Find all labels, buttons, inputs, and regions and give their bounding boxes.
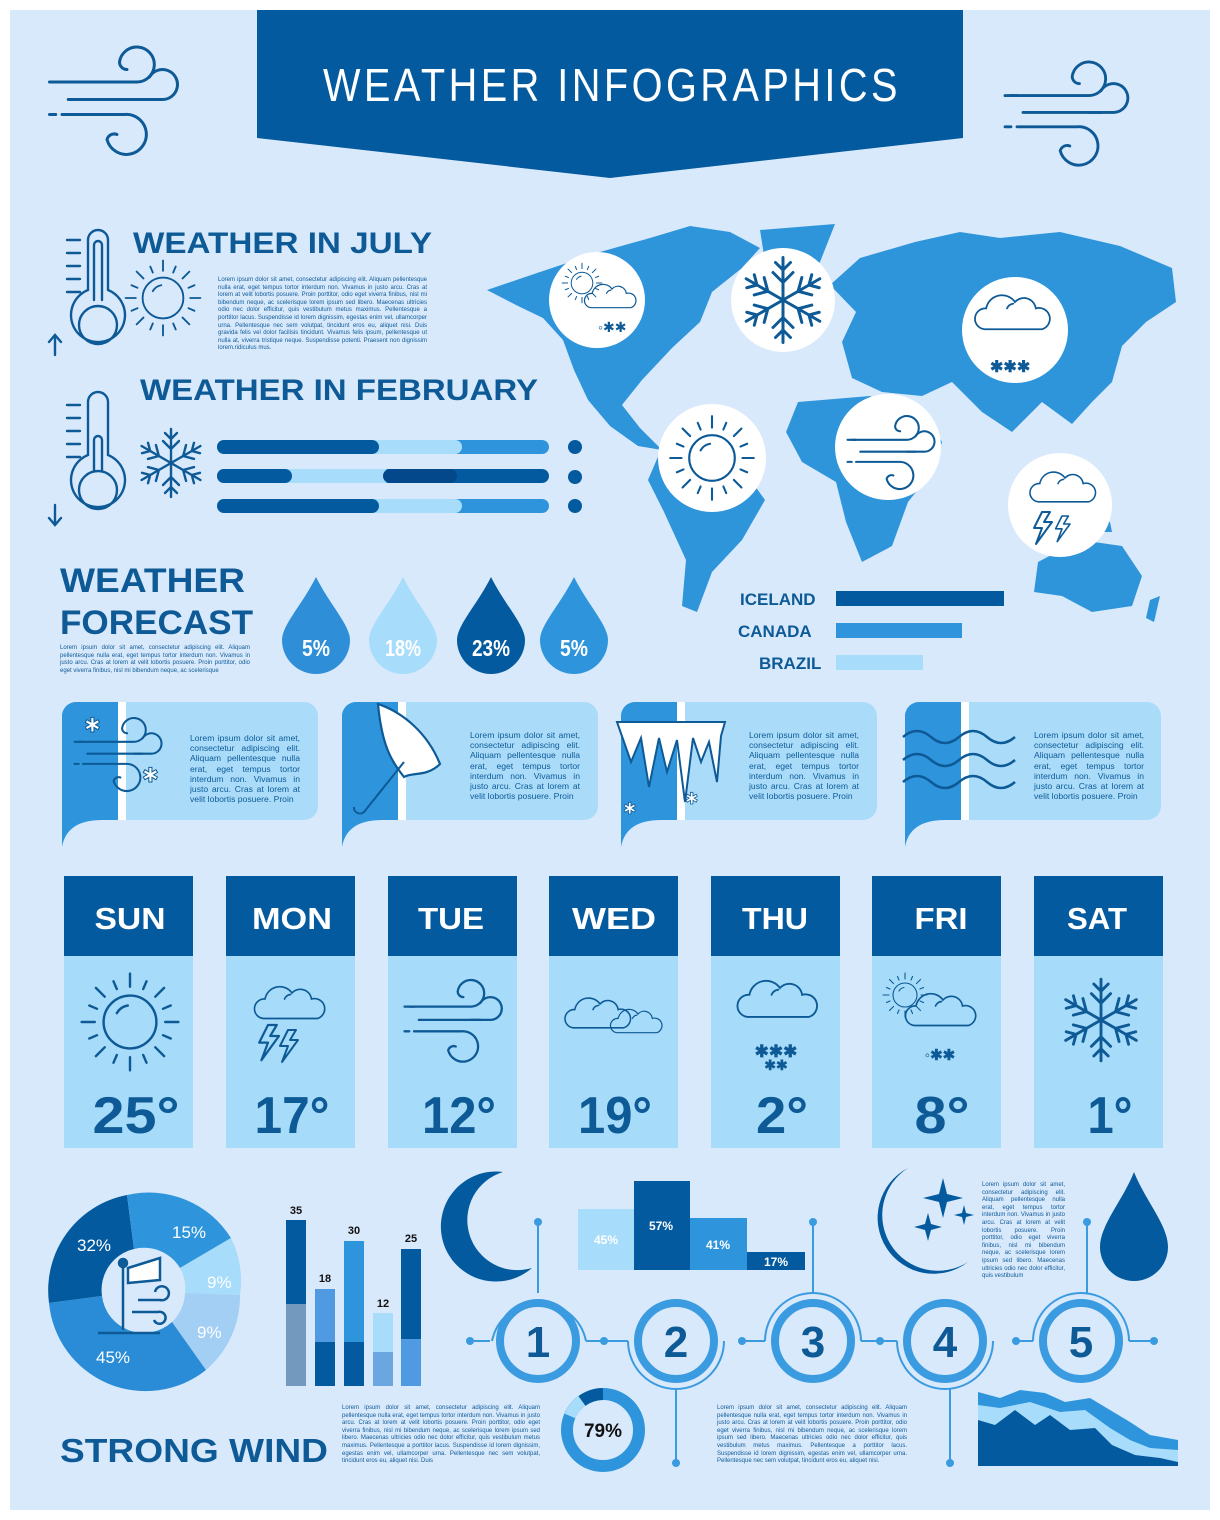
numbered timeline: 4: [933, 1318, 958, 1367]
numbered timeline: [466, 1218, 1158, 1467]
day: sun: [64, 876, 193, 1148]
bar chart: 18: [319, 1273, 331, 1285]
title banner: WEATHER INFOGRAPHICS: [323, 59, 901, 111]
text: moon description: Lorem ipsum dolor sit amet, consectetur adipiscing elit. Aliquam pellentesque nulla erat, eget tempus tortor interdum non. Vivamus in justo arcu. Cras at lorem at velit lobortis posuere. Proin porttitor, odio eget viverra finibus, nisl mi bibendum neque, ac scelerisque lorem ipsum sed libero. Maecenas ultricies odio nec dolor efficitur, quis vestibulum: [982, 1182, 1065, 1279]
day: sun: SUN: [94, 901, 166, 936]
day: tue: TUE: [418, 901, 484, 936]
text: card 1: Lorem ipsum dolor sit amet, consectetur adipiscing elit. Aliquam pellentesque nulla erat, eget tempus tortor interdum non. Vivamus in justo arcu. Cras at lorem at velit lobortis posuere. Proin: [190, 733, 300, 804]
day: sat: [1034, 876, 1163, 1148]
numbered timeline: 5: [1069, 1318, 1093, 1367]
icon: sun july: [126, 261, 200, 335]
day: wed: [549, 876, 678, 1148]
title banner: [257, 10, 963, 178]
day: thu: [711, 876, 840, 1148]
donut chart: wind: 9%: [207, 1273, 232, 1292]
map circles with weather icons: ✱✱✱: [990, 359, 1030, 376]
icon: thermometer up: [49, 230, 125, 355]
text: forecast description: Lorem ipsum dolor sit amet, consectetur adipiscing elit. Aliquam pellentesque nulla erat, eget tempus tortor interdum non. Vivamus in justo arcu. Cras at lorem at velit lobortis posuere. Proin porttitor, odio eget viverra finibus, nisl mi bibendum neque, ac scelerisque: [60, 645, 250, 674]
callout cards: [62, 702, 1161, 847]
map legend: CANADA: [738, 622, 812, 641]
numbered timeline: 3: [801, 1318, 825, 1367]
heading: weather forecast: WEATHER: [60, 562, 245, 600]
bar chart: 30: [348, 1225, 360, 1237]
text: card 2: Lorem ipsum dolor sit amet, consectetur adipiscing elit. Aliquam pellentesque nulla erat, eget tempus tortor interdum non. Vivamus in justo arcu. Cras at lorem at velit lobortis posuere. Proin: [470, 730, 580, 801]
text: july description: Lorem ipsum dolor sit amet, consectetur adipiscing elit. Aliquam pellentesque nulla erat, eget tempus tortor interdum non. Vivamus in justo arcu. Cras at lorem at velit lobortis posuere. Proin porttitor, odio eget viverra finibus, nisl mi bibendum neque, ac scelerisque lorem ipsum sed libero. Maecenas ultricies odio nec dolor efficitur, quis vestibulum metus maximus. Pellentesque a porttitor lacus. Suspendisse id lorem dignissim, egestas enim vel, ullamcorper urna. Pellentesque nec sem volutpat, tincidunt eros eu, aliquet nisi. Duis gravida felis vel dolor facilisis tincidunt. Vivamus felis ipsum, pellentesque ut nulla at, viverra tristique neque. Suspendisse potenti. Praesent non dignissim lorem.ridiculus mus.: [218, 277, 427, 351]
icon: moon: [441, 1172, 532, 1282]
day: sat: SAT: [1067, 901, 1127, 936]
day: thu: ✱✱✱: [755, 1042, 797, 1061]
heading: weather forecast: [60, 562, 253, 642]
day: thu: ✱✱: [764, 1057, 788, 1073]
area chart: [978, 1390, 1178, 1466]
icon: snowflake february: [138, 429, 204, 497]
icon: wind top-left: [50, 47, 177, 154]
map circles with weather icons: [549, 248, 1112, 557]
day: fri: ◦✱✱: [925, 1047, 956, 1064]
bar chart: 25: [405, 1233, 417, 1245]
map legend: ICELAND: [740, 590, 816, 609]
text: timeline description: Lorem ipsum dolor sit amet, consectetur adipiscing elit. Aliquam pellentesque nulla erat, eget tempus tortor interdum non. Vivamus in justo arcu. Cras at lorem at velit lobortis posuere. Proin porttitor, odio eget viverra finibus, nisl mi bibendum neque, ac scelerisque lorem ipsum sed libero. Maecenas ultricies odio nec dolor efficitur, quis vestibulum metus maximus. Pellentesque a porttitor lacus. Suspendisse id lorem dignissim, egestas enim vel, ullamcorper urna. Pellentesque nec sem volutpat, tincidunt eros eu, aliquet nisi.: [717, 1405, 907, 1464]
numbered timeline: 1: [526, 1318, 550, 1367]
callout: snowy wind: ✱: [84, 715, 101, 737]
day: wed: 19°: [578, 1087, 652, 1145]
day: wed: WED: [572, 901, 656, 936]
callout: umbrella: [342, 702, 598, 847]
heading: weather in february: WEATHER IN FEBRUARY: [140, 374, 538, 407]
day: sun: 25°: [92, 1087, 180, 1145]
icon: thermometer down: [49, 392, 125, 525]
donut: 79%: 79%: [584, 1421, 622, 1442]
map legend: BRAZIL: [759, 654, 821, 673]
bar chart: 12: [377, 1298, 389, 1310]
callout: icicles: [617, 702, 877, 847]
donut chart: wind: 9%: [197, 1323, 222, 1342]
drops: forecast percentages: 5%: [302, 635, 330, 661]
donut: 79%: [567, 1394, 639, 1466]
callout: icicles: ✱: [623, 801, 636, 818]
heading: weather forecast: FORECAST: [60, 604, 253, 642]
bar chart: [286, 1205, 421, 1386]
drops: forecast percentages: [282, 577, 608, 674]
step bar chart: 41%: [706, 1238, 730, 1252]
heading: weather in july: WEATHER IN JULY: [133, 227, 432, 260]
day: tue: [388, 876, 517, 1148]
day: fri: FRI: [914, 901, 968, 936]
donut chart: wind: 15%: [172, 1223, 206, 1242]
heading: strong wind: STRONG WIND: [60, 1432, 328, 1469]
icon: moon and stars: [878, 1168, 974, 1274]
day forecast cards: [64, 876, 1163, 1148]
day: mon: MON: [252, 901, 332, 936]
step bar chart: 17%: [764, 1255, 788, 1269]
callout: snowy wind: ✱: [142, 765, 159, 787]
day: mon: 17°: [254, 1087, 330, 1145]
day: mon: [226, 876, 355, 1148]
map circles with weather icons: ◦✱✱: [598, 319, 626, 335]
day: sat: 1°: [1088, 1087, 1132, 1145]
icon: drop: [1100, 1172, 1168, 1281]
day: fri: [872, 876, 1001, 1148]
callout: snowy wind: [62, 702, 318, 847]
drops: forecast percentages: 23%: [472, 635, 510, 661]
step bar chart: 45%: [594, 1233, 618, 1247]
callout: icicles: ✱: [685, 791, 698, 808]
drops: forecast percentages: 18%: [385, 635, 421, 661]
callout: waves: [903, 702, 1161, 847]
donut chart: wind: 45%: [96, 1348, 130, 1367]
icon: wind top-right: [1005, 62, 1128, 165]
text: wind description: Lorem ipsum dolor sit amet, consectetur adipiscing elit. Aliquam pellentesque nulla erat, eget tempus tortor interdum non. Vivamus in justo arcu. Cras at lorem at velit lobortis posuere. Proin porttitor, odio eget viverra finibus, nisl mi bibendum neque, ac scelerisque lorem ipsum sed libero. Maecenas ultricies odio nec dolor efficitur, quis vestibulum metus maximus. Pellentesque a porttitor lacus. Suspendisse id lorem dignissim, egestas enim vel, ullamcorper urna. Pellentesque nec sem volutpat, tincidunt eros eu, aliquet nisi. Duis: [342, 1405, 540, 1464]
drops: forecast percentages: 5%: [560, 635, 588, 661]
text: card 4: Lorem ipsum dolor sit amet, consectetur adipiscing elit. Aliquam pellentesque nulla erat, eget tempus tortor interdum non. Vivamus in justo arcu. Cras at lorem at velit lobortis posuere. Proin: [1034, 730, 1144, 801]
numbered timeline: 2: [664, 1318, 688, 1367]
step bar chart: 57%: [649, 1219, 673, 1233]
day: thu: 2°: [756, 1087, 808, 1145]
text: card 3: Lorem ipsum dolor sit amet, consectetur adipiscing elit. Aliquam pellentesque nulla erat, eget tempus tortor interdum non. Vivamus in justo arcu. Cras at lorem at velit lobortis posuere. Proin: [749, 730, 859, 801]
bar chart: 35: [290, 1205, 302, 1217]
step bar chart: [578, 1181, 805, 1270]
world map: [487, 224, 1176, 622]
day: thu: THU: [742, 901, 808, 936]
february bars: [224, 440, 582, 513]
donut chart: wind: [48, 1193, 241, 1391]
map legend: [738, 590, 1004, 673]
donut chart: wind: 32%: [77, 1236, 111, 1255]
day: fri: 8°: [914, 1087, 970, 1145]
day: tue: 12°: [422, 1087, 496, 1145]
